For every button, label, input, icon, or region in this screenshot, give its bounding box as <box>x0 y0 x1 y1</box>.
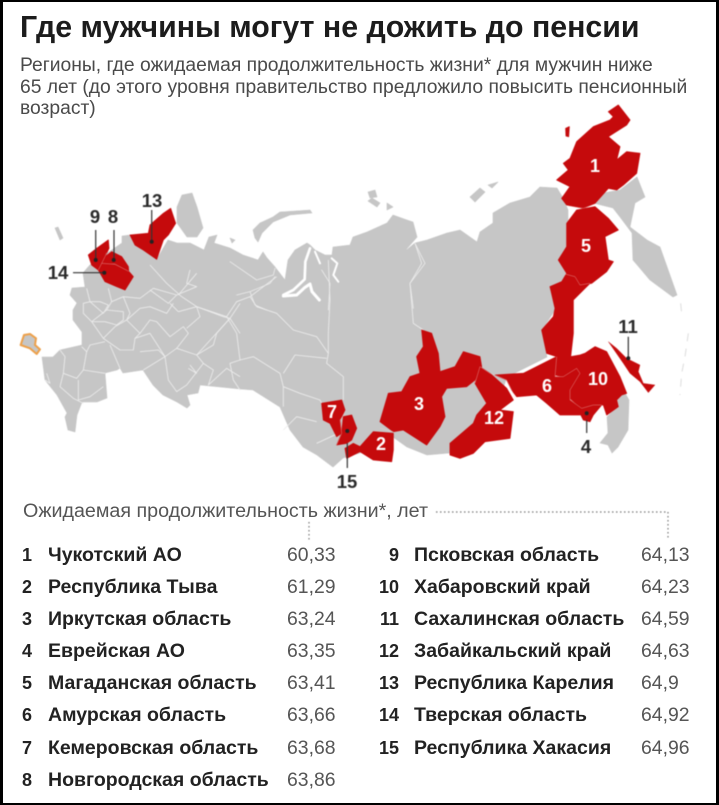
region 15 Khakassia <box>337 415 357 445</box>
row 7: Кемеровская область <box>48 737 258 759</box>
row 3: 3 <box>22 609 32 629</box>
row 15 <box>379 737 690 759</box>
row 6 <box>22 704 336 726</box>
row 2: Республика Тыва <box>48 576 217 598</box>
row 10: Хабаровский край <box>414 576 591 598</box>
row 14: Тверская область <box>414 704 587 726</box>
region 2 Tyva <box>345 432 393 462</box>
black region numbers: 14 <box>48 262 69 283</box>
row 15: Республика Хакасия <box>414 737 611 759</box>
black region numbers: 13 <box>142 190 162 211</box>
inner borders between red regions <box>98 204 602 445</box>
white region numbers: 10 <box>588 369 608 389</box>
region 8 Novgorod <box>102 252 129 271</box>
exclave in orange outline <box>21 334 40 354</box>
white region numbers: 1 <box>590 156 600 176</box>
white region numbers: 3 <box>414 394 424 414</box>
row 14 <box>379 704 690 726</box>
row 5: Магаданская область <box>48 672 257 694</box>
region 12 Zabaikalsky <box>450 367 513 458</box>
row 13: Республика Карелия <box>414 672 614 694</box>
black region numbers: 11 <box>618 316 638 337</box>
row 9 <box>389 544 690 566</box>
row 11: Сахалинская область <box>414 608 624 630</box>
black region numbers: 8 <box>108 206 118 227</box>
region 5 Magadan <box>558 207 618 285</box>
region borders Urals and Siberia <box>150 260 343 443</box>
Ob gulf and northern inlets <box>230 243 425 310</box>
row 12: 12 <box>379 641 399 661</box>
row 8: Новгородская область <box>48 769 269 791</box>
row 3: Иркутская область <box>48 608 231 630</box>
row 15: 15 <box>379 738 399 758</box>
white region numbers <box>327 156 608 454</box>
row 11: 64,59 <box>641 608 690 630</box>
row 14: 14 <box>379 705 399 725</box>
row 3 <box>22 608 336 630</box>
region 10 Khabarovsk <box>542 273 627 415</box>
row 10: 10 <box>379 577 399 597</box>
black region numbers <box>48 190 638 492</box>
row 13: 64,9 <box>641 672 679 694</box>
row 9: 64,13 <box>641 544 690 566</box>
row 6: 6 <box>22 705 32 725</box>
white region numbers: 6 <box>542 376 552 396</box>
table: right column <box>379 544 690 759</box>
row 8: 63,86 <box>287 769 336 791</box>
Kuril islands <box>680 303 688 395</box>
black region numbers: 15 <box>337 471 357 492</box>
row 2 <box>22 576 336 598</box>
row 12 <box>379 640 690 662</box>
row 4: 63,35 <box>287 640 336 662</box>
white region numbers: 12 <box>484 408 504 428</box>
row 11 <box>380 608 690 630</box>
row 4 <box>22 640 336 662</box>
white region numbers: 2 <box>376 434 386 454</box>
row 5: 63,41 <box>287 672 336 694</box>
row 6: 63,66 <box>287 704 336 726</box>
row 5 <box>22 672 336 694</box>
row 8: 8 <box>22 770 32 790</box>
row 5: 5 <box>22 673 32 693</box>
black region numbers: 4 <box>581 436 592 457</box>
row 1 <box>22 544 336 566</box>
row 13: 13 <box>379 673 399 693</box>
row 4: Еврейская АО <box>48 640 185 662</box>
subtitle: Регионы, где ожидаемая продолжительность жизни* для мужчин ниже <box>20 55 653 76</box>
row 9: 9 <box>389 545 399 565</box>
dotted leaders of table header <box>309 512 668 540</box>
region 11 Sakhalin <box>608 342 655 393</box>
table: left column <box>22 544 336 791</box>
leader lines and dots <box>73 210 630 468</box>
white region numbers: 7 <box>327 402 337 422</box>
region 7 Kemerovo <box>322 400 345 437</box>
region 6 Amur <box>495 357 582 415</box>
region 1 Chukotka <box>557 105 640 208</box>
row 3: 63,24 <box>287 608 336 630</box>
region borders European part <box>45 270 240 403</box>
subtitle <box>20 55 687 119</box>
region 4 Jewish AO <box>580 405 602 422</box>
row 15: 64,96 <box>641 737 690 759</box>
title: Где мужчины могут не дожить до пенсии <box>20 11 640 44</box>
white region numbers: 5 <box>581 236 591 256</box>
row 2: 2 <box>22 577 32 597</box>
region 14 Tver <box>98 263 133 290</box>
table heading: Ожидаемая продолжительность жизни*, лет <box>23 500 428 522</box>
row 14: 64,92 <box>641 704 690 726</box>
region 13 Karelia <box>130 208 176 259</box>
row 10: 64,23 <box>641 576 690 598</box>
row 11: 11 <box>380 609 399 629</box>
region borders east <box>410 243 423 330</box>
row 7 <box>22 737 336 759</box>
row 2: 61,29 <box>287 576 336 598</box>
row 7: 7 <box>22 738 32 758</box>
row 13 <box>379 672 679 694</box>
grey territory of Russia <box>42 177 677 467</box>
row 6: Амурская область <box>48 704 226 726</box>
region 9 Pskov <box>88 240 109 270</box>
row 7: 63,68 <box>287 737 336 759</box>
row 1: Чукотский АО <box>48 544 182 566</box>
row 12: 64,63 <box>641 640 690 662</box>
row 1: 1 <box>22 545 32 565</box>
region 3 Irkutsk <box>380 330 482 445</box>
row 1: 60,33 <box>287 544 336 566</box>
row 9: Псковская область <box>414 544 599 566</box>
row 12: Забайкальский край <box>414 640 611 662</box>
black region numbers: 9 <box>90 206 100 227</box>
subtitle: 65 лет (до этого уровня правительство предложило повысить пенсионный <box>20 77 687 98</box>
row 10 <box>379 576 690 598</box>
subtitle: возраст) <box>20 98 96 119</box>
row 4: 4 <box>22 641 32 661</box>
